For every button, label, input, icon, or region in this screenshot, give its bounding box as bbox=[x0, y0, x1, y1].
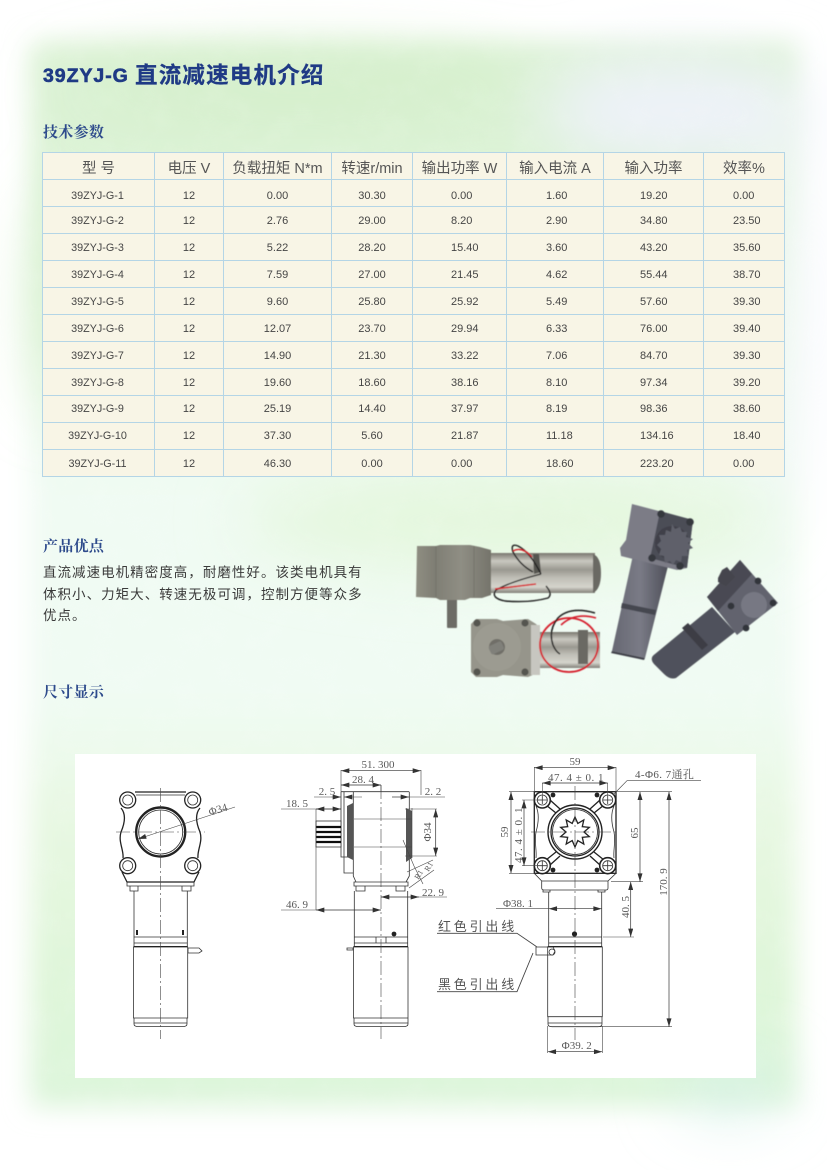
table body: 25.19 bbox=[264, 403, 291, 415]
table body: 14.90 bbox=[264, 350, 291, 362]
table body: 9.60 bbox=[267, 296, 288, 308]
table body: 8.20 bbox=[451, 215, 472, 227]
rear view dimensions: 59 bbox=[499, 826, 511, 838]
table body: 38.70 bbox=[733, 269, 761, 281]
table body: 37.97 bbox=[451, 403, 479, 415]
table body: 39ZYJ-G-3 bbox=[71, 242, 124, 254]
table body: 39ZYJ-G-2 bbox=[71, 215, 124, 227]
table body: 97.34 bbox=[640, 377, 668, 389]
advantages text: 直流减速电机精密度高，耐磨性好。该类电机具有 bbox=[43, 565, 363, 580]
table body: 39ZYJ-G-9 bbox=[71, 403, 124, 415]
side view dimensions: 18. 5 bbox=[286, 798, 308, 810]
table body: 76.00 bbox=[640, 323, 668, 335]
label: red lead wire bbox=[437, 919, 537, 947]
header row: 输出功率 W bbox=[422, 160, 497, 176]
table body: 12.07 bbox=[264, 323, 291, 335]
table body: 12 bbox=[183, 430, 195, 442]
table body: 15.40 bbox=[451, 242, 479, 254]
dimension: front bore bbox=[138, 801, 235, 839]
table body: 12 bbox=[183, 350, 195, 362]
table body: 39ZYJ-G-7 bbox=[71, 350, 124, 362]
table body: 12 bbox=[183, 190, 195, 202]
rear view dimensions: 47. 4 ± 0. 1 bbox=[548, 772, 604, 784]
table body: 39ZYJ-G-11 bbox=[68, 458, 126, 470]
table body: 21.87 bbox=[451, 430, 479, 442]
table body: 25.92 bbox=[451, 296, 479, 308]
panel background bbox=[75, 754, 756, 1078]
table body: 30.30 bbox=[358, 190, 386, 202]
side view dimensions: 28. 4 bbox=[352, 774, 374, 786]
table body: 37.30 bbox=[264, 430, 291, 442]
side view dimensions: 2. 2 bbox=[425, 786, 441, 798]
table body: 43.20 bbox=[640, 242, 668, 254]
table body: 7.59 bbox=[267, 269, 288, 281]
table body: 84.70 bbox=[640, 350, 668, 362]
drawing: front view bbox=[116, 788, 235, 1039]
side view dimensions: Φ34 bbox=[422, 822, 434, 842]
table body: 27.00 bbox=[358, 269, 386, 281]
side view dimensions: 51. 300 bbox=[362, 759, 395, 771]
title: 39ZYJ-G bbox=[43, 65, 129, 87]
advantages text: 优点。 bbox=[43, 608, 87, 623]
table body: 39.40 bbox=[733, 323, 761, 335]
table body: 18.60 bbox=[358, 377, 386, 389]
rear view dimensions: Φ38. 1 bbox=[503, 898, 533, 910]
table body: 0.00 bbox=[361, 458, 383, 470]
table body: 12 bbox=[183, 269, 195, 281]
side view dimensions bbox=[281, 759, 447, 911]
rear view dimensions: 170. 9 bbox=[658, 868, 670, 896]
table body: 38.60 bbox=[733, 403, 761, 415]
table body: 12 bbox=[183, 296, 195, 308]
rear view dimensions: Φ39. 2 bbox=[562, 1040, 592, 1052]
table body: 12 bbox=[183, 242, 195, 254]
table body: 11.18 bbox=[546, 430, 573, 442]
table body: 12 bbox=[183, 403, 195, 415]
table body: 5.49 bbox=[546, 296, 567, 308]
rear view dimensions: 40. 5 bbox=[620, 896, 632, 918]
table body: 21.30 bbox=[358, 350, 386, 362]
header row: 型 号 bbox=[82, 160, 115, 176]
cad: tilted motor bbox=[652, 560, 778, 678]
table body: 6.33 bbox=[546, 323, 567, 335]
table body: 5.22 bbox=[267, 242, 288, 254]
header row: 转速r/min bbox=[341, 160, 403, 176]
table body: 46.30 bbox=[264, 458, 291, 470]
header row: 输入功率 bbox=[624, 160, 682, 176]
heading: dimensions: 尺寸显示 bbox=[43, 685, 104, 701]
table body: 34.80 bbox=[640, 215, 668, 227]
rear view dimensions bbox=[496, 756, 701, 1053]
label: mounting holes: 4-Φ6. 7通孔 bbox=[635, 767, 694, 781]
dimension: front bore: Φ34 bbox=[207, 801, 229, 819]
table body: 29.94 bbox=[451, 323, 479, 335]
table body: 39.30 bbox=[733, 296, 761, 308]
rear view dimensions: 47. 4 ± 0. 1 bbox=[513, 807, 525, 863]
table body: 12 bbox=[183, 323, 195, 335]
table body: 19.20 bbox=[640, 190, 668, 202]
table body: 2.76 bbox=[267, 215, 288, 227]
table body: 223.20 bbox=[640, 458, 674, 470]
table body: 1.60 bbox=[546, 190, 567, 202]
side view dimensions: R1 bbox=[423, 860, 435, 873]
page: 直流减速电机介绍 bbox=[135, 63, 325, 88]
table body: 39ZYJ-G-6 bbox=[71, 323, 124, 335]
table body: 28.20 bbox=[358, 242, 386, 254]
table body: 0.00 bbox=[267, 190, 288, 202]
label: black lead wire bbox=[437, 953, 533, 992]
header row: 负载扭矩 N*m bbox=[232, 160, 323, 176]
drawing: rear view bbox=[437, 756, 701, 1053]
dimension drawing panel bbox=[75, 754, 756, 1078]
drawing: side view bbox=[281, 759, 447, 1039]
table body: 2.90 bbox=[546, 215, 567, 227]
side view dimensions: 22. 9 bbox=[422, 887, 444, 899]
table body: 8.19 bbox=[546, 403, 567, 415]
table body: 14.40 bbox=[358, 403, 386, 415]
header row: 电压 V bbox=[168, 160, 210, 176]
table body: 7.06 bbox=[546, 350, 567, 362]
table body: 0.00 bbox=[451, 458, 472, 470]
photo: motor side view bbox=[416, 545, 601, 628]
table body: 3.60 bbox=[546, 242, 567, 254]
table body: 55.44 bbox=[640, 269, 668, 281]
table body: 4.62 bbox=[546, 269, 567, 281]
table body: 21.45 bbox=[451, 269, 479, 281]
advantages text bbox=[43, 565, 363, 623]
heading: technical parameters: 技术参数 bbox=[43, 125, 104, 141]
advantages text: 体积小、力矩大、转速无极可调，控制方便等众多 bbox=[43, 587, 363, 602]
table body: 39ZYJ-G-5 bbox=[71, 296, 124, 308]
table body: 29.00 bbox=[358, 215, 386, 227]
photo: motor front view bbox=[471, 610, 600, 677]
table body: 39ZYJ-G-1 bbox=[71, 190, 124, 202]
table body: 39ZYJ-G-4 bbox=[71, 269, 124, 281]
table body: 0.00 bbox=[733, 190, 754, 202]
table body: 23.50 bbox=[733, 215, 761, 227]
table body: 18.60 bbox=[546, 458, 574, 470]
label: mounting holes bbox=[613, 767, 701, 795]
table body: 23.70 bbox=[358, 323, 386, 335]
table body: 0.00 bbox=[733, 458, 754, 470]
table body bbox=[68, 160, 765, 470]
table body: 33.22 bbox=[451, 350, 479, 362]
table body: 39.30 bbox=[733, 350, 761, 362]
cad: upright motor bbox=[611, 504, 694, 660]
spec table bbox=[42, 152, 785, 477]
table body: 57.60 bbox=[640, 296, 668, 308]
table body: 39ZYJ-G-8 bbox=[71, 377, 124, 389]
side view dimensions: R1 bbox=[413, 868, 425, 881]
table body: 12 bbox=[183, 215, 195, 227]
table body: 98.36 bbox=[640, 403, 668, 415]
header row: 输入电流 A bbox=[519, 160, 591, 176]
table body: 12 bbox=[183, 377, 195, 389]
rear view dimensions: 65 bbox=[629, 827, 641, 838]
motor photos bbox=[415, 504, 778, 680]
table body: 134.16 bbox=[640, 430, 674, 442]
label: black lead wire: 黑色引出线 bbox=[438, 977, 517, 992]
rear view dimensions: 59 bbox=[570, 756, 581, 768]
table body: 25.80 bbox=[358, 296, 386, 308]
table body: 19.60 bbox=[264, 377, 291, 389]
side view dimensions: 2. 5 bbox=[319, 786, 336, 798]
side view dimensions: 46. 9 bbox=[286, 899, 308, 911]
table body: 39ZYJ-G-10 bbox=[68, 430, 127, 442]
table body: 5.60 bbox=[361, 430, 383, 442]
table body: 12 bbox=[183, 458, 195, 470]
header row: 效率% bbox=[723, 160, 765, 176]
header row bbox=[82, 160, 765, 176]
label: red lead wire: 红色引出线 bbox=[438, 919, 517, 934]
heading: product advantages: 产品优点 bbox=[43, 539, 104, 555]
title bbox=[43, 63, 325, 88]
table body: 8.10 bbox=[546, 377, 567, 389]
table body: 38.16 bbox=[451, 377, 479, 389]
table body: 39.20 bbox=[733, 377, 761, 389]
table body: 18.40 bbox=[733, 430, 761, 442]
table body: 35.60 bbox=[733, 242, 761, 254]
table body: 0.00 bbox=[451, 190, 472, 202]
